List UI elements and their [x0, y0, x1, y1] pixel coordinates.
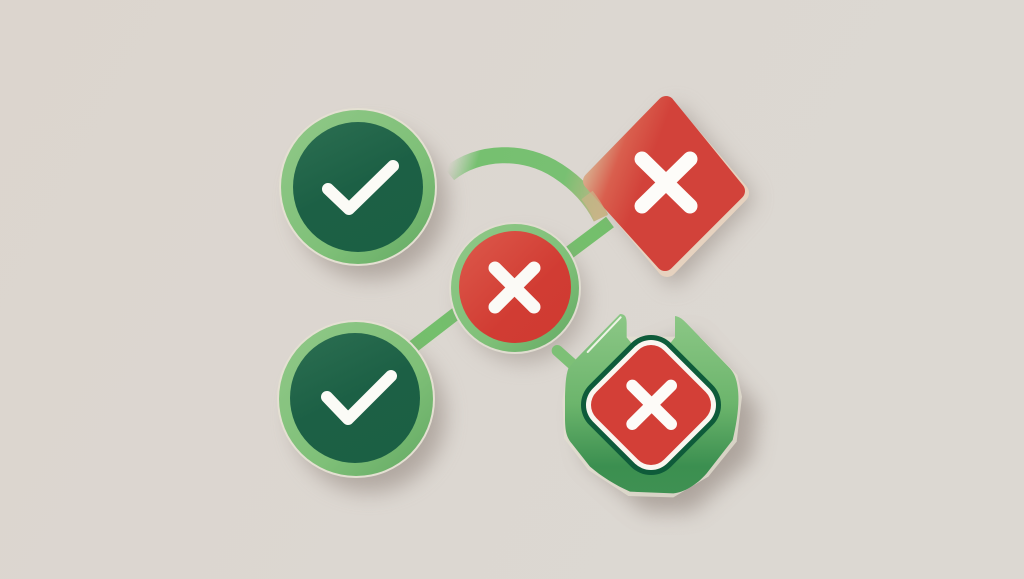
cross: [632, 386, 671, 424]
icon: bottom check badge: [277, 320, 445, 492]
shield shadow: [578, 335, 758, 512]
arc connector: [449, 155, 601, 218]
connector: centre node to diamond: [566, 222, 611, 257]
white frame: [609, 363, 693, 447]
icon: green shield with cross: [557, 314, 758, 512]
stub connector: [557, 351, 573, 365]
shell highlight: [588, 317, 621, 352]
dark frame: [609, 363, 693, 447]
arc end blending into diamond: [587, 195, 601, 218]
red face: [609, 363, 693, 447]
connector: lower check to centre node: [410, 312, 458, 351]
icon: red diamond cross: [592, 105, 744, 276]
icon: centre cross badge: [449, 222, 586, 362]
green shell: [565, 314, 738, 493]
icon: top check badge: [279, 108, 447, 279]
shield halo: [562, 337, 742, 497]
